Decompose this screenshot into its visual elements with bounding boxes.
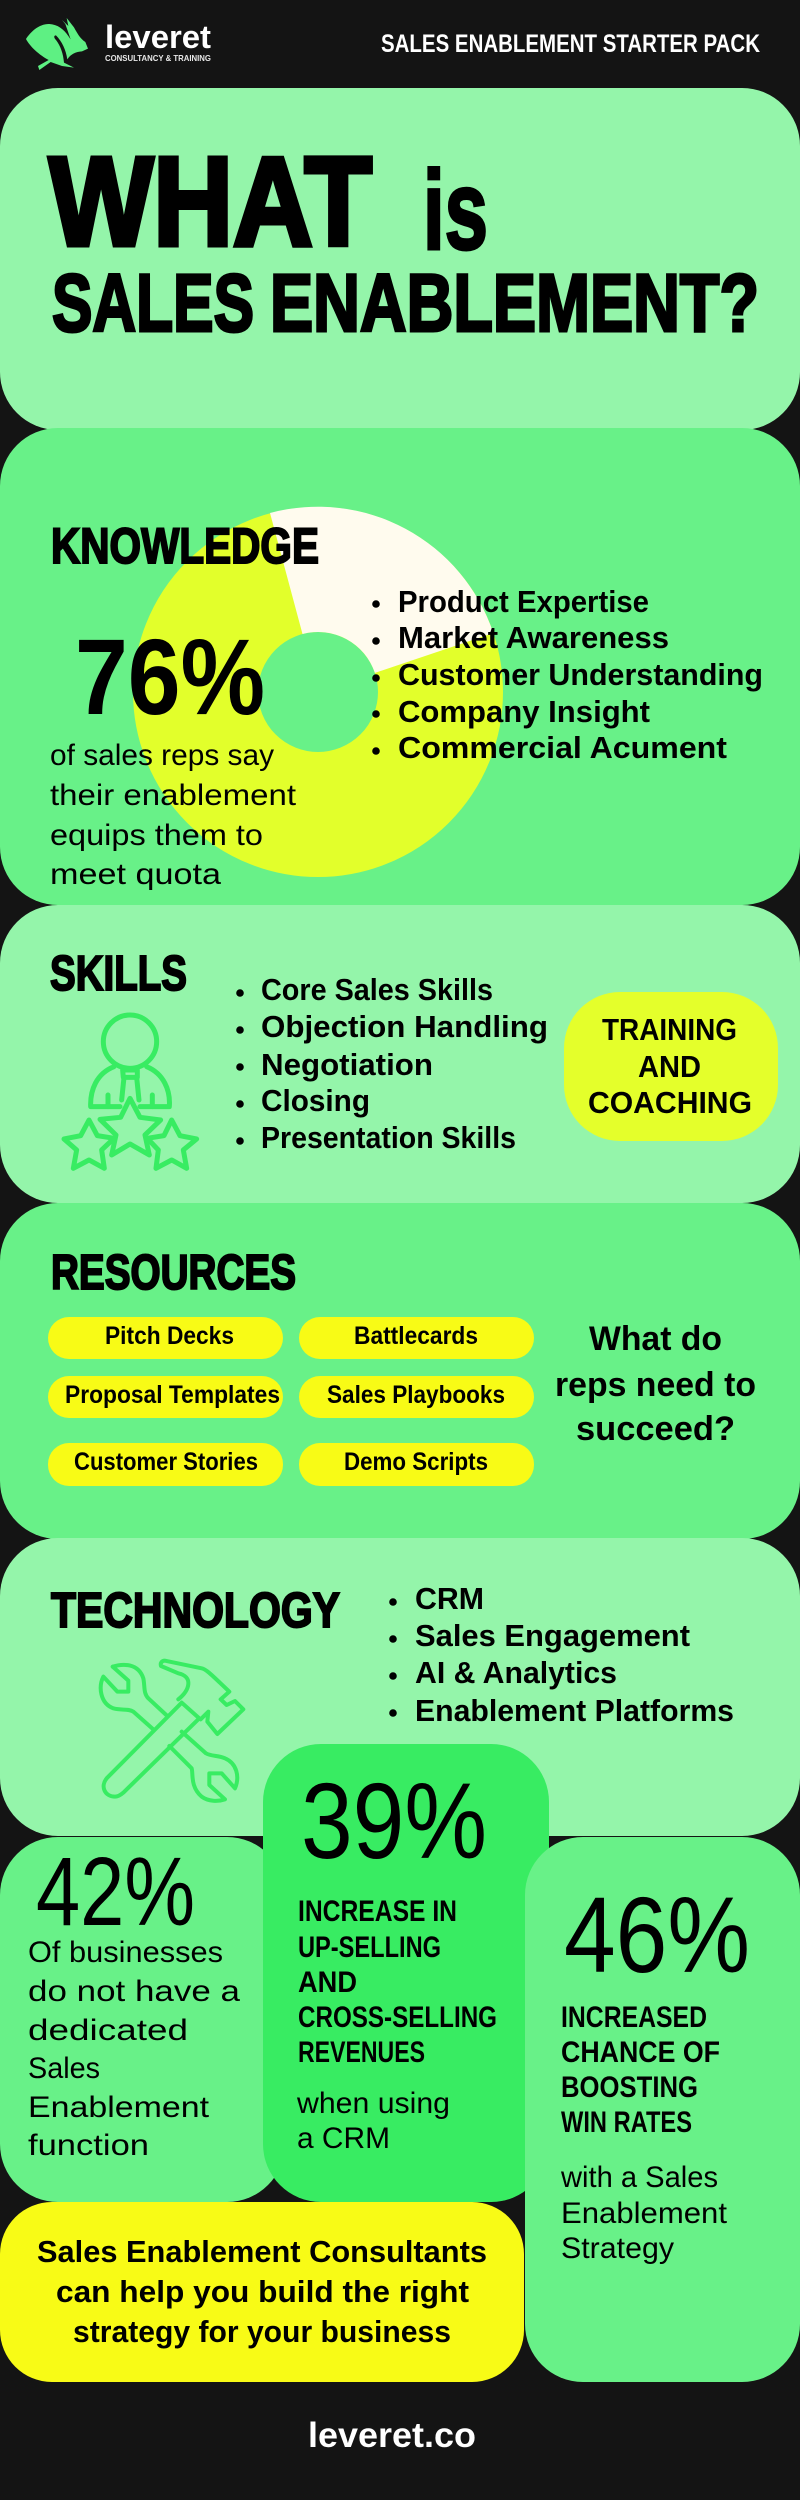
resource pills: Customer Stories	[74, 1448, 258, 1476]
stat headline: AND	[298, 1966, 357, 1999]
stat headline: CROSS-SELLING	[298, 2001, 497, 2034]
stat headline	[561, 2001, 720, 2139]
heading: technology: TECHNOLOGY	[51, 1584, 340, 1638]
donut chart: 76 percent	[196, 507, 493, 814]
panel: title	[0, 88, 800, 430]
stat description: of sales reps say	[50, 739, 274, 772]
panel: consultants call to action: Sales Enablement Consultants	[37, 2234, 487, 2269]
resource pills: Demo Scripts	[344, 1448, 488, 1476]
stat: 76 percent: 76%	[75, 616, 265, 737]
technology list	[389, 1581, 734, 1728]
stat description	[296, 2087, 450, 2155]
panel: consultants call to action: can help you build the right	[56, 2274, 469, 2309]
stat description	[50, 739, 297, 891]
panel: resources	[0, 1203, 800, 1539]
stat headline: BOOSTING	[561, 2071, 698, 2104]
panel: consultants call to action	[0, 2202, 524, 2382]
stat description: Enablement	[28, 2091, 210, 2124]
resource pills: Pitch Decks	[105, 1322, 234, 1350]
stat description: with a Sales	[560, 2161, 718, 2194]
icon: person with stars	[64, 1015, 197, 1168]
stat description: a CRM	[297, 2122, 390, 2155]
heading: knowledge: KNOWLEDGE	[51, 518, 319, 574]
knowledge list	[372, 584, 763, 765]
question text: succeed?	[576, 1410, 735, 1448]
callout: training and coaching: AND	[638, 1049, 701, 1084]
skills list: Objection Handling	[261, 1009, 548, 1044]
resource pills: Battlecards	[354, 1322, 478, 1350]
stat headline: INCREASE IN	[298, 1895, 457, 1928]
skills list: Negotiation	[261, 1047, 433, 1082]
logo wordmark: leveret	[105, 19, 211, 55]
panel: knowledge	[0, 428, 800, 905]
knowledge list: Company Insight	[398, 694, 650, 729]
resource pills: Proposal Templates	[65, 1381, 280, 1409]
stat description	[28, 1936, 240, 2162]
stat description: Sales	[28, 2052, 100, 2085]
heading: what is sales enablement: SALES	[52, 258, 254, 349]
technology list: AI & Analytics	[415, 1655, 617, 1690]
stat description	[560, 2161, 728, 2265]
heading: skills: SKILLS	[50, 947, 187, 1001]
stat headline: WIN RATES	[561, 2106, 692, 2139]
panel: technology	[0, 1538, 800, 1836]
knowledge list: Market Awareness	[398, 620, 669, 655]
heading: what is sales enablement: is	[423, 148, 488, 273]
skills list	[236, 972, 548, 1155]
stat description: Enablement	[561, 2197, 728, 2230]
panel: skills	[0, 905, 800, 1203]
skills list: Presentation Skills	[261, 1120, 516, 1155]
header	[26, 18, 760, 70]
technology list: Sales Engagement	[415, 1618, 690, 1653]
knowledge list: Commercial Acument	[398, 730, 727, 765]
resource pills	[48, 1317, 534, 1486]
knowledge list: Customer Understanding	[398, 657, 763, 692]
stat description: when using	[296, 2087, 450, 2120]
stat: 46 percent: 46%	[564, 1874, 750, 1995]
stat description: function	[28, 2129, 149, 2162]
callout: training and coaching: TRAINING	[602, 1012, 737, 1047]
panel: 46 percent stat	[525, 1837, 800, 2382]
resource pills: Sales Playbooks	[327, 1381, 505, 1409]
heading: what is sales enablement: WHAT	[49, 131, 372, 272]
knowledge list: Product Expertise	[398, 584, 649, 619]
stat: 42 percent: 42%	[36, 1837, 195, 1946]
stat: 39 percent: 39%	[301, 1760, 487, 1881]
stat headline: REVENUES	[298, 2036, 425, 2069]
heading: resources: RESOURCES	[51, 1246, 296, 1300]
footer: website: leveret.co	[308, 2416, 476, 2455]
skills list: Core Sales Skills	[261, 972, 493, 1007]
technology list: CRM	[415, 1581, 484, 1616]
stat description: Strategy	[561, 2232, 674, 2265]
stat headline: INCREASED	[561, 2001, 707, 2034]
icon: leveret rabbit logo	[26, 18, 88, 70]
question text: reps need to	[555, 1366, 756, 1404]
panel: consultants call to action: strategy for your business	[73, 2314, 451, 2349]
stat description: dedicated	[28, 2014, 188, 2047]
stat headline	[298, 1895, 497, 2069]
logo wordmark: CONSULTANCY & TRAINING	[105, 53, 211, 63]
stat description: do not have a	[28, 1975, 240, 2008]
stat description: meet quota	[50, 858, 221, 891]
stat headline: UP-SELLING	[298, 1931, 441, 1964]
heading: what is sales enablement	[49, 131, 759, 349]
panel: 42 percent stat	[0, 1837, 285, 2202]
icon: hammer and wrench	[101, 1661, 243, 1801]
stat description: their enablement	[50, 779, 297, 812]
question text: What do	[589, 1320, 722, 1358]
panel: 39 percent stat	[263, 1744, 549, 2202]
question text	[555, 1320, 756, 1448]
callout: training and coaching	[564, 992, 778, 1141]
stat headline: CHANCE OF	[561, 2036, 720, 2069]
stat description: equips them to	[50, 819, 263, 852]
technology list: Enablement Platforms	[415, 1693, 734, 1728]
skills list: Closing	[261, 1083, 370, 1118]
callout: training and coaching: COACHING	[588, 1085, 752, 1120]
stat description: Of businesses	[28, 1936, 223, 1969]
